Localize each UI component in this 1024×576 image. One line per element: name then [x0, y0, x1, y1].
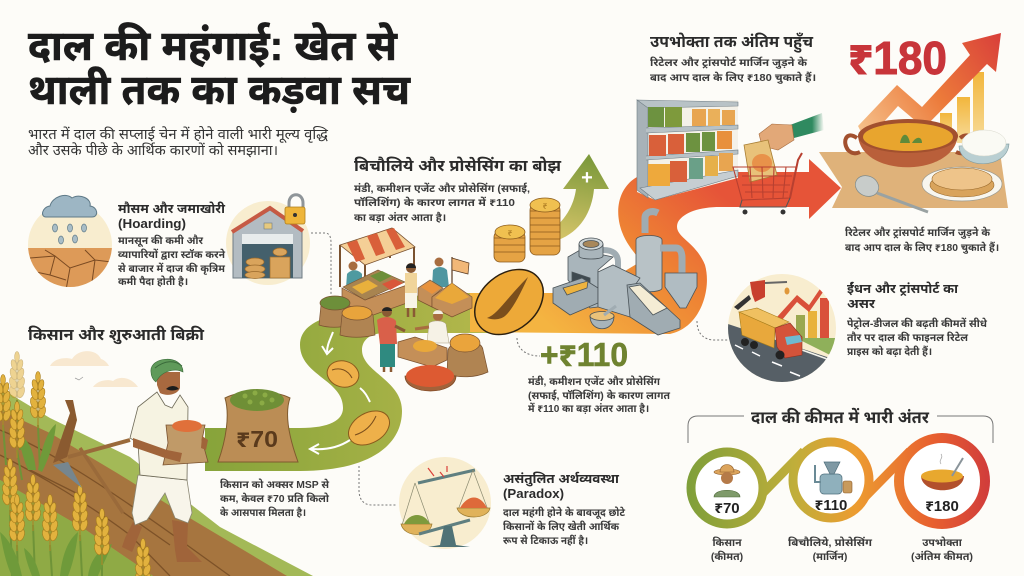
text: fuel and transport: तौर पर दाल की फाइनल रिटेल	[847, 330, 968, 344]
icon: unbalanced scale	[399, 457, 491, 549]
arrow: green up plus: +	[581, 167, 593, 189]
icon: sack labelled 70	[218, 389, 298, 462]
heading: price gap: दाल की कीमत में भारी अंतर	[751, 407, 929, 427]
text: middlemen margin: (सफाई, पॉलिशिंग) के कारण लागत	[528, 388, 670, 402]
arm and hands	[133, 436, 208, 462]
icon: shopping cart	[733, 153, 802, 214]
icon: sack labelled 70: ₹70	[236, 426, 278, 452]
illustration: farmer	[53, 359, 208, 562]
truck	[739, 308, 802, 360]
text: weather and hoarding: व्यापारियों द्वारा स्टॉक करने	[117, 247, 226, 261]
icon: rain over cracked earth	[28, 195, 112, 290]
icon: large dal bean	[462, 256, 556, 348]
plate and rotis	[922, 167, 1002, 201]
arrows on path	[310, 332, 370, 454]
text: weather and hoarding: मौसम और जमाखोरी	[118, 201, 225, 216]
price: 70: ₹70	[714, 500, 740, 517]
icon: small dal bean bottom	[342, 404, 396, 452]
illustration: retail shelf	[637, 100, 738, 200]
green price path	[205, 293, 500, 471]
icon: coin stacks: ₹	[508, 228, 513, 238]
plough	[53, 400, 130, 513]
text: paradox: किसानों के लिए खेती आर्थिक	[503, 519, 619, 533]
arrow: green up plus	[548, 154, 609, 240]
customer	[377, 307, 405, 372]
dhoti	[132, 475, 192, 525]
padlock	[289, 195, 303, 208]
stall counter	[342, 270, 407, 318]
table	[819, 152, 1008, 208]
subtitle: भारत में दाल की सप्लाई चेन में होने वाली भारी मूल्य वृद्धि	[28, 125, 329, 144]
heading: final reach to consumer: उपभोक्ता तक अंतिम पहुँच	[650, 32, 814, 53]
ribbon rings	[691, 438, 985, 524]
rear leg	[122, 522, 142, 552]
hopper unit	[568, 238, 618, 308]
heading: middlemen burden: बिचौलिये और प्रोसेसिंग का बोझ	[354, 156, 562, 175]
text: weather and hoarding: कमी पैदा होती है।	[118, 275, 188, 288]
orange price path with arrow	[470, 159, 841, 334]
stall posts	[340, 235, 414, 308]
middle unit	[598, 265, 640, 317]
packets row 3	[648, 153, 733, 186]
text: retail margin repeated: बाद आप दाल के लिए ₹180 चुकाते हैं।	[845, 240, 999, 255]
sacks	[319, 296, 375, 337]
text: middlemen margin: मंडी, कमीशन एजेंट और प्रोसेसिंग	[528, 374, 660, 388]
vendor left	[346, 262, 362, 288]
tank	[636, 212, 682, 292]
heading: final reach to consumer: रिटेलर और ट्रांसपोर्ट मार्जिन जुड़ने के	[650, 55, 807, 70]
heading: middlemen burden: का बड़ा अंतर आता है।	[354, 211, 446, 224]
heading: middlemen burden: मंडी, कमीशन एजेंट और प्रोसेसिंग (सफाई,	[354, 181, 530, 195]
front leg	[172, 520, 202, 562]
conveyor	[627, 283, 680, 335]
text: paradox	[503, 471, 625, 547]
discharge tray	[553, 278, 598, 315]
packets row 2	[649, 131, 732, 156]
labels: (अंतिम कीमत)	[911, 550, 973, 563]
text: paradox: (Paradox)	[503, 487, 564, 501]
icon: farmer	[714, 464, 740, 497]
illustration: dal bowl meal	[845, 119, 1009, 212]
subtitle: और उसके पीछे के आर्थिक कारणों को समझाना।	[28, 141, 278, 158]
illustration: processing machine	[553, 212, 697, 335]
striped awning	[340, 228, 415, 265]
connector: sack to scale	[359, 466, 396, 505]
icon: coin stacks	[494, 198, 560, 262]
number: 180: ₹180	[848, 32, 947, 84]
subtitle	[28, 125, 329, 158]
vendor with flag	[432, 257, 469, 287]
fuel nozzle	[734, 280, 790, 310]
title	[28, 22, 411, 113]
rain cloud	[43, 195, 97, 217]
icon: locked warehouse	[226, 195, 310, 285]
text: farmer price: किसान को अक्सर MSP से	[220, 477, 329, 491]
text: farmer price	[220, 477, 330, 519]
vendor standing	[405, 263, 417, 317]
heading: final reach to consumer	[650, 32, 816, 85]
text: middlemen margin	[528, 374, 670, 415]
labels	[711, 535, 973, 563]
clouds and birds	[50, 351, 138, 387]
text: retail margin repeated: रिटेलर और ट्रांसपोर्ट मार्जिन जुड़ने के	[845, 225, 990, 240]
connector: bean to price	[517, 338, 540, 356]
text: farmer price: कम, केवल ₹70 प्रति किलो	[220, 491, 330, 505]
red spice bowl	[405, 365, 456, 391]
grain bowl	[590, 306, 616, 329]
price: 110: ₹110	[815, 497, 847, 514]
lower sack	[447, 334, 488, 377]
chart: rising arrow and bars	[858, 33, 1001, 143]
title: थाली तक का कड़वा सच	[28, 66, 411, 113]
panel: price gap	[688, 407, 993, 563]
wheat plants	[0, 352, 152, 576]
text: paradox: दाल महंगी होने के बावजूद छोटे	[503, 505, 625, 520]
text: fuel and transport: असर	[847, 297, 876, 311]
icon: hand with dal packet	[744, 113, 824, 182]
labels: उपभोक्ता	[922, 536, 963, 549]
icon: mill	[815, 462, 852, 494]
price: 180: ₹180	[925, 498, 959, 515]
text: weather and hoarding: मानसून की कमी और	[118, 234, 203, 248]
icon: dal bowl	[921, 454, 964, 490]
text: retail margin repeated	[845, 225, 999, 255]
heading: final reach to consumer: बाद आप दाल के लिए ₹180 चुकाते हैं।	[650, 70, 816, 85]
text: weather and hoarding	[117, 201, 226, 288]
shirt	[130, 392, 188, 480]
text: paradox: असंतुलित अर्थव्यवस्था	[503, 471, 619, 488]
packets row 1	[648, 107, 735, 127]
illustration: market stall and vendors	[319, 228, 488, 391]
bracket	[688, 416, 993, 443]
text: farmer price: के आसपास मिलता है।	[220, 505, 306, 519]
rice bowl	[959, 130, 1009, 164]
green hillside field	[0, 351, 313, 576]
text: fuel and transport: प्राइस को बढ़ा देती हैं।	[847, 344, 932, 358]
heading: middlemen burden: पॉलिशिंग) के कारण लागत में ₹110	[354, 195, 515, 209]
heading: farmer and first sale: किसान और शुरुआती बिक्री	[28, 325, 204, 345]
pot	[845, 119, 972, 167]
labels: (मार्जिन)	[813, 550, 847, 563]
heading: middlemen burden	[354, 156, 562, 224]
text: fuel and transport	[847, 281, 988, 358]
text: paradox: रूप से टिकाऊ नहीं है।	[503, 533, 588, 547]
silo	[665, 273, 697, 308]
number: plus 110: +₹110	[540, 336, 628, 373]
mini bars	[796, 298, 829, 338]
text: fuel and transport: ईंधन और ट्रांसपोर्ट का	[847, 281, 958, 296]
labels: बिचौलिये, प्रोसेसिंग	[788, 535, 873, 549]
lower crate	[398, 337, 447, 367]
crates of spices	[418, 280, 472, 317]
seated vendor	[415, 310, 449, 343]
small sack	[163, 420, 208, 465]
text: fuel and transport: पेट्रोल-डीजल की बढ़ती कीमतें सीधे	[847, 316, 988, 330]
labels: (कीमत)	[711, 550, 743, 563]
icon: coin stacks: ₹	[543, 201, 548, 211]
head	[151, 359, 183, 395]
text: weather and hoarding: से बाजार में दाज की कृत्रिम	[118, 261, 225, 276]
icon: fuel truck rising prices	[728, 274, 836, 382]
text: weather and hoarding: (Hoarding)	[118, 217, 186, 231]
spoon	[852, 172, 928, 212]
icon: small dal bean top	[324, 357, 362, 391]
text: middlemen margin: में ₹110 का बड़ा अंतर आता है।	[528, 402, 649, 415]
mini arrow	[778, 289, 823, 319]
connector: machine to truck	[697, 321, 728, 340]
title: दाल की महंगाई: खेत से	[28, 22, 398, 69]
connector: warehouse to market	[311, 233, 331, 295]
labels: किसान	[712, 536, 742, 549]
